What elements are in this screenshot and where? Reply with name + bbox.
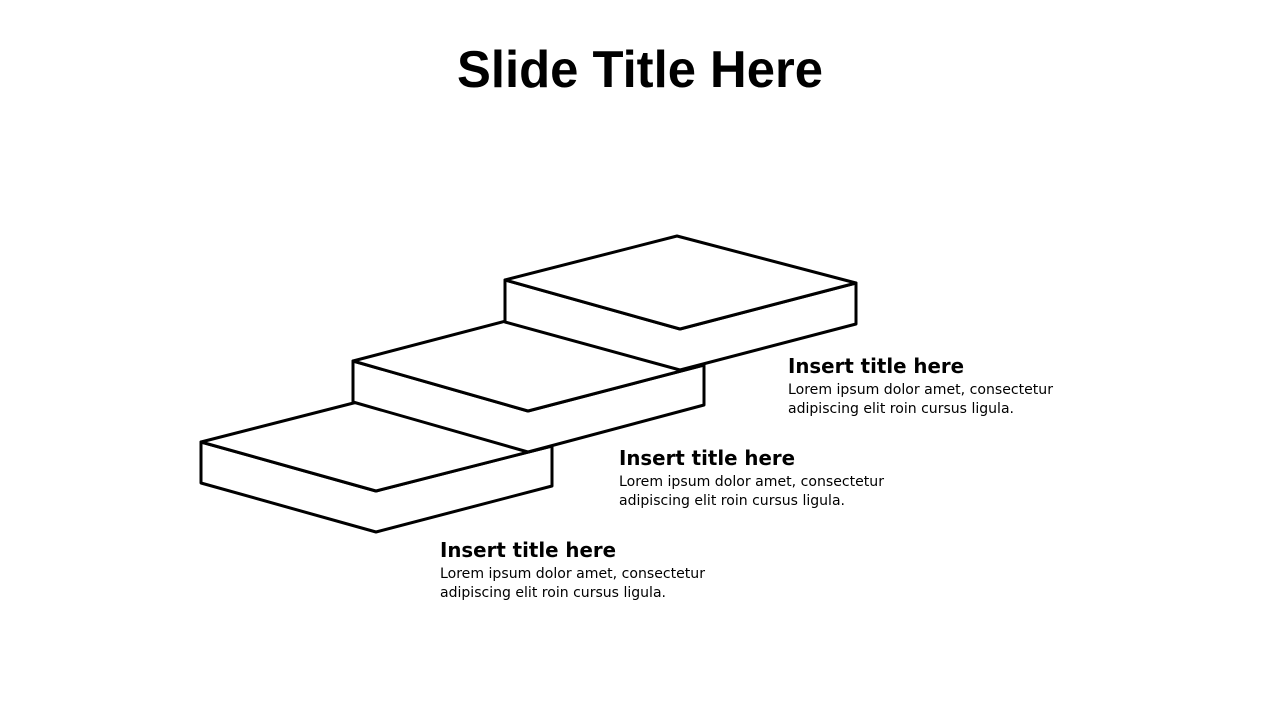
step 2 — [353, 315, 704, 452]
text block 1 — [440, 538, 705, 601]
text block 2 — [619, 446, 884, 509]
text block 1: adipiscing elit roin cursus ligula. — [440, 585, 666, 601]
text block 3: adipiscing elit roin cursus ligula. — [788, 401, 1014, 417]
text block 2: Lorem ipsum dolor amet, consectetur — [619, 474, 884, 490]
text block 3: Insert title here — [788, 354, 964, 378]
step 3 — [505, 236, 856, 370]
title: Slide Title Here — [457, 41, 823, 99]
text block 1: Lorem ipsum dolor amet, consectetur — [440, 566, 705, 582]
text block 1: Insert title here — [440, 538, 616, 562]
staircase — [201, 236, 856, 532]
step 1 — [201, 397, 552, 532]
text block 3: Lorem ipsum dolor amet, consectetur — [788, 382, 1053, 398]
text block 2: Insert title here — [619, 446, 795, 470]
text block 2: adipiscing elit roin cursus ligula. — [619, 493, 845, 509]
text block 3 — [788, 354, 1053, 417]
